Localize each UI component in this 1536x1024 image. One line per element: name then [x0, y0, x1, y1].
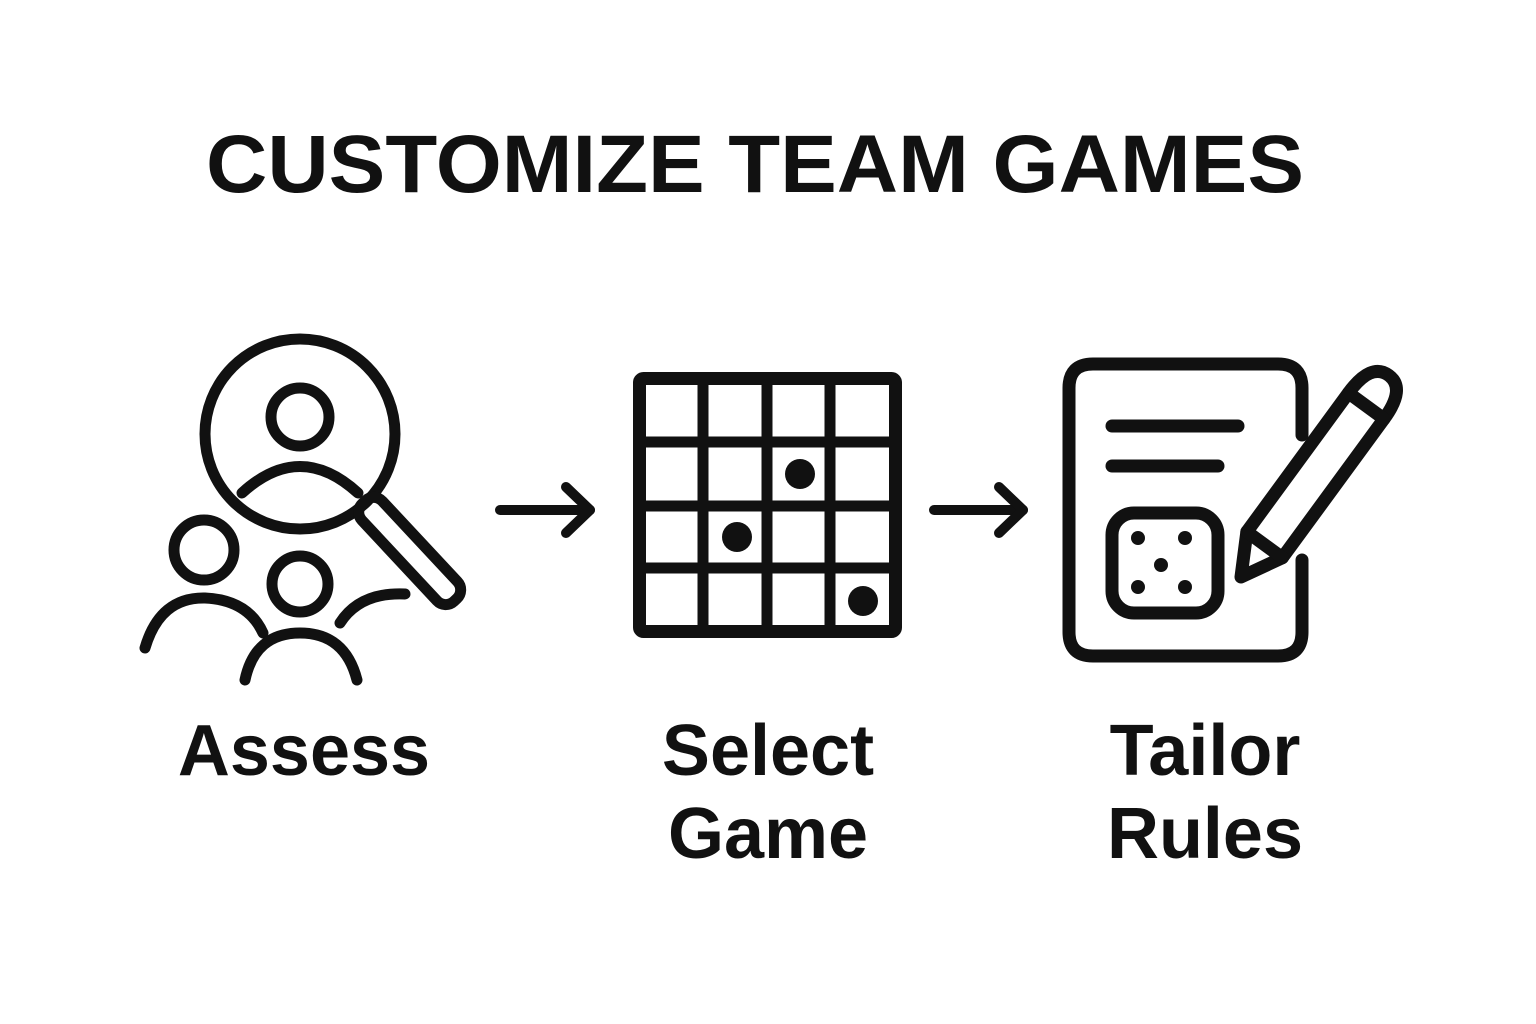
icon: assess (magnifier with people) [145, 339, 466, 680]
label: Select Game: Game [668, 794, 868, 874]
label: Tailor Rules: Rules [1107, 794, 1303, 874]
arrow 1 [500, 487, 590, 533]
title: CUSTOMIZE TEAM GAMES [206, 119, 1304, 210]
label: Assess: Assess [178, 711, 430, 791]
icon: game grid [639, 378, 896, 632]
arrow 2 [934, 487, 1023, 533]
label: Select Game: Select [662, 711, 874, 791]
label: Tailor Rules: Tailor [1110, 711, 1300, 791]
icon: document with dice and pencil [1069, 362, 1406, 656]
